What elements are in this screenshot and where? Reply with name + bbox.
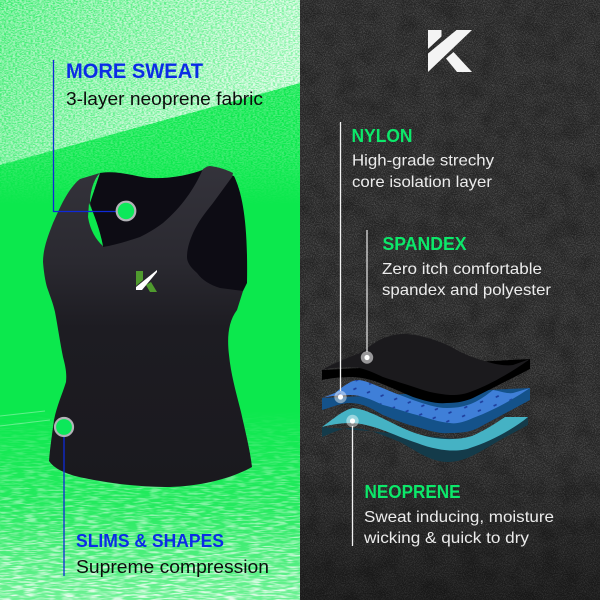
heading and text: more sweat: MORE SWEAT bbox=[66, 60, 203, 83]
vest armhole gap bbox=[88, 203, 103, 246]
fabric layers diagram bbox=[322, 334, 530, 462]
heading and text: slims and shapes: SLIMS & SHAPES bbox=[76, 531, 224, 551]
panel: green background bbox=[0, 0, 300, 600]
heading and text: neoprene: Sweat inducing, moisture bbox=[364, 509, 554, 526]
heading and text: nylon: NYLON bbox=[352, 126, 412, 146]
heading and text: spandex: spandex and polyester bbox=[382, 282, 552, 299]
vest body bbox=[43, 166, 252, 487]
icon: K logo bbox=[428, 30, 472, 72]
heading and text: spandex: SPANDEX bbox=[382, 234, 466, 254]
teal neoprene layer bbox=[322, 408, 528, 462]
vest inner back bbox=[90, 169, 247, 300]
panel: dark textured background bbox=[300, 0, 600, 600]
callout line and marker: nylon bbox=[334, 122, 347, 403]
heading and text: spandex bbox=[382, 234, 552, 299]
heading and text: nylon bbox=[352, 126, 494, 191]
heading and text: more sweat bbox=[66, 60, 263, 109]
heading and text: spandex: Zero itch comfortable bbox=[382, 261, 542, 278]
vest logo bbox=[136, 270, 157, 292]
callout line and marker: neoprene bbox=[346, 415, 359, 546]
callout line and marker: spandex bbox=[361, 230, 373, 364]
heading and text: slims and shapes bbox=[76, 531, 269, 577]
heading and text: neoprene: NEOPRENE bbox=[364, 482, 460, 502]
heading and text: nylon: High-grade strechy bbox=[352, 152, 494, 170]
heading and text: neoprene bbox=[363, 482, 554, 547]
blue spandex layer bbox=[322, 380, 530, 433]
heading and text: slims and shapes: Supreme compression bbox=[76, 557, 269, 577]
callout line and marker: slims and shapes bbox=[55, 418, 73, 576]
callout line and marker: more sweat bbox=[54, 60, 135, 220]
heading and text: nylon: core isolation layer bbox=[352, 174, 493, 191]
heading and text: more sweat: 3-layer neoprene fabric bbox=[66, 89, 263, 109]
heading and text: neoprene: wicking & quick to dry bbox=[363, 530, 529, 547]
black nylon layer bbox=[322, 334, 530, 403]
vest illustration bbox=[43, 166, 252, 487]
